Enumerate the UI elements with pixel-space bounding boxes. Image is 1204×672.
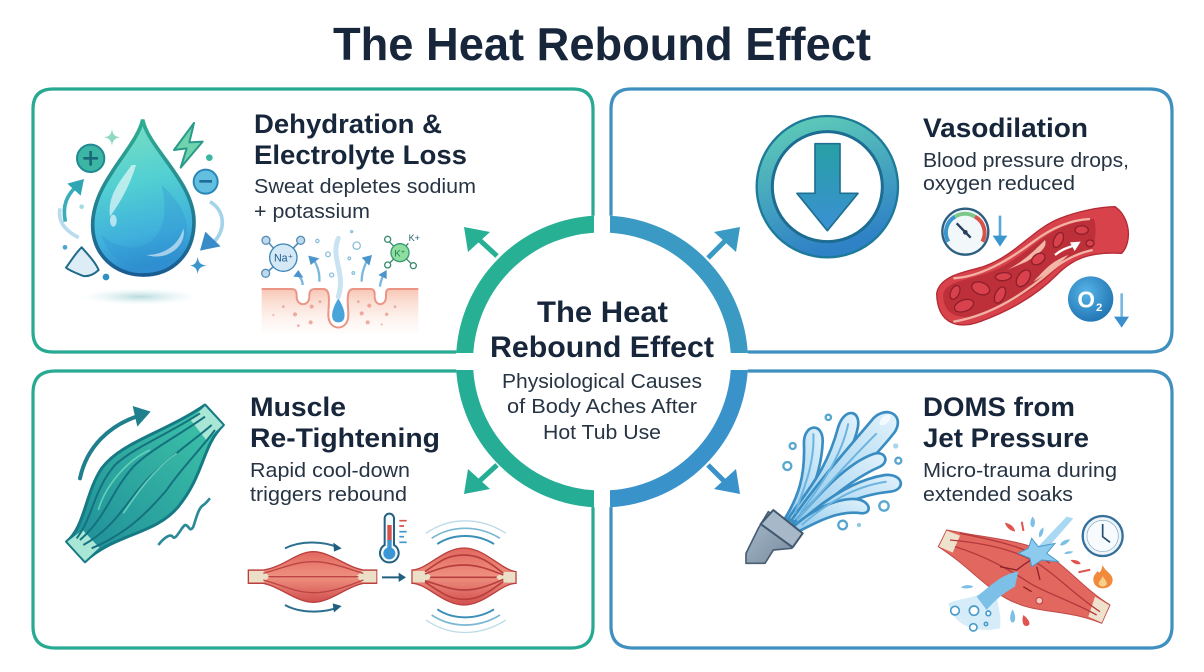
arrow: to bottom right: [708, 465, 740, 494]
icon: oxygen: O: [1077, 287, 1095, 313]
center heading: Rebound Effect: [490, 331, 714, 364]
text: DOMS description: Micro-trauma during: [923, 459, 1117, 482]
icon: teal muscle: [67, 405, 223, 562]
icon: downward arrow in ring: [757, 116, 898, 257]
arrow: to bottom left: [464, 465, 497, 494]
panel: muscle border: [33, 371, 593, 648]
text: DOMS description: extended soaks: [923, 483, 1073, 506]
text: muscle description: Rapid cool-down: [250, 459, 410, 482]
text: muscle description: [250, 459, 410, 506]
text: dehydration description: [254, 175, 476, 223]
text: dehydration description: Sweat depletes sodium: [254, 175, 476, 198]
heading: muscle: [250, 392, 440, 453]
heading: dehydration: Dehydration &: [254, 109, 442, 139]
center heading: [490, 296, 714, 364]
text: vasodilation description: Blood pressure drops,: [923, 149, 1129, 172]
panel: DOMS border: [611, 371, 1172, 648]
vessel: [937, 207, 1128, 325]
heading: dehydration: Electrolyte Loss: [254, 140, 467, 170]
icon: clock: [1083, 516, 1123, 556]
center subtitle: Physiological Causes: [502, 371, 702, 393]
illustration: sweat on skin with sodium and potassium: K⁺: [394, 248, 406, 258]
heading: vasodilation: Vasodilation: [923, 113, 1088, 143]
center subtitle: [502, 371, 702, 444]
center heading: The Heat: [537, 296, 668, 329]
arrow: to top left: [464, 227, 497, 256]
heading: muscle: Muscle: [250, 392, 346, 422]
panel: vasodilation border: [611, 89, 1172, 352]
illustration: sweat on skin with sodium and potassium: Na⁺: [274, 253, 294, 265]
title: The Heat Rebound Effect: [333, 18, 871, 70]
icon: water jet nozzle: [746, 412, 901, 563]
illustration: muscle cooling and rebound: [248, 514, 516, 632]
text: DOMS description: [923, 459, 1117, 506]
heading: muscle: Re-Tightening: [250, 423, 440, 453]
text: dehydration description: + potassium: [254, 200, 370, 223]
ring arc: bottom right: [610, 370, 748, 508]
icon: thermometer: [380, 514, 407, 562]
heading: dehydration: [254, 109, 467, 170]
icon: water drop cluster: [60, 120, 222, 305]
ring arc: top left: [456, 216, 594, 353]
panel: dehydration border: [33, 89, 593, 352]
icon: flame: [1093, 565, 1113, 588]
illustration: sweat on skin with sodium and potassium: [262, 231, 420, 333]
ring arc: top right: [610, 216, 748, 353]
arrow: to top right: [708, 227, 740, 258]
text: muscle description: triggers rebound: [250, 483, 407, 506]
heading: DOMS: [923, 392, 1089, 453]
illustration: jet pressure on muscle: [938, 516, 1123, 631]
text: vasodilation description: [923, 149, 1129, 195]
center subtitle: Hot Tub Use: [543, 422, 661, 444]
text: vasodilation description: oxygen reduced: [923, 172, 1075, 195]
icon: oxygen: 2: [1096, 302, 1102, 314]
heading: DOMS: Jet Pressure: [923, 423, 1089, 453]
illustration: sweat on skin with sodium and potassium: K+: [409, 233, 420, 243]
center hub: [456, 216, 748, 508]
icon: pressure gauge: [942, 209, 1007, 255]
icon: oxygen: [1068, 276, 1129, 328]
ring arc: bottom left: [456, 370, 594, 508]
illustration: blood vessel, pressure gauge and oxygen: [937, 207, 1129, 328]
heading: DOMS: DOMS from: [923, 392, 1075, 422]
center subtitle: of Body Aches After: [507, 396, 697, 418]
